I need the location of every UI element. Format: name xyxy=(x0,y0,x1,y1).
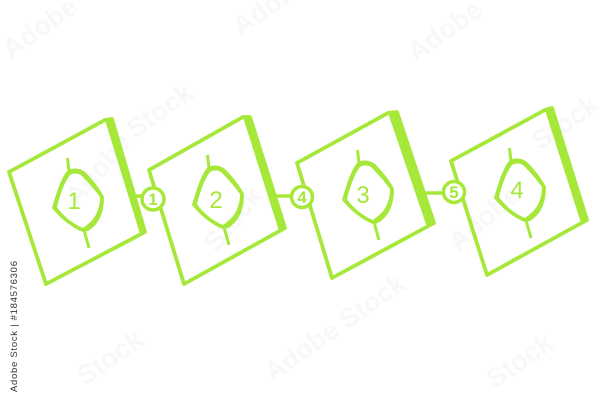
connector badge 1 xyxy=(142,188,164,210)
panel 1 xyxy=(9,119,146,284)
panel 2 xyxy=(149,116,286,284)
stock watermarks: Stock xyxy=(198,181,269,257)
stock id text: Adobe Stock | #184576306 xyxy=(9,261,20,392)
panel 4 number: 4 xyxy=(510,177,524,204)
panel 1 number: 1 xyxy=(67,188,81,215)
stock watermarks: Adobe Stock xyxy=(259,267,412,387)
panel 4 frame xyxy=(451,108,588,275)
stock watermarks: Stock xyxy=(481,327,559,394)
panel 3 xyxy=(297,111,435,278)
panel 1 blob icon xyxy=(52,158,104,248)
connector badge 1: 1 xyxy=(148,190,158,209)
panel 1 frame xyxy=(9,119,146,284)
stock watermarks: Stock xyxy=(121,77,199,144)
panel 2 blob icon xyxy=(192,155,244,245)
connector lines xyxy=(135,193,445,196)
connector badge 4: 4 xyxy=(297,188,307,207)
stock watermarks: Stock xyxy=(71,324,149,391)
panel 4 blob icon xyxy=(494,148,546,238)
stock watermarks: Adobe xyxy=(442,180,526,257)
connector badge 5: 5 xyxy=(449,183,459,202)
panel 2 number: 2 xyxy=(209,187,223,214)
panel 3 frame xyxy=(297,111,435,278)
panel 4 xyxy=(451,108,588,275)
panel 3 blob icon xyxy=(342,150,394,240)
stock watermarks: Adobe xyxy=(60,127,137,211)
panel 3 number: 3 xyxy=(356,182,370,209)
connector badge 4 xyxy=(292,186,312,208)
connector badge 5 xyxy=(444,182,464,202)
panel 2 frame xyxy=(149,116,286,284)
